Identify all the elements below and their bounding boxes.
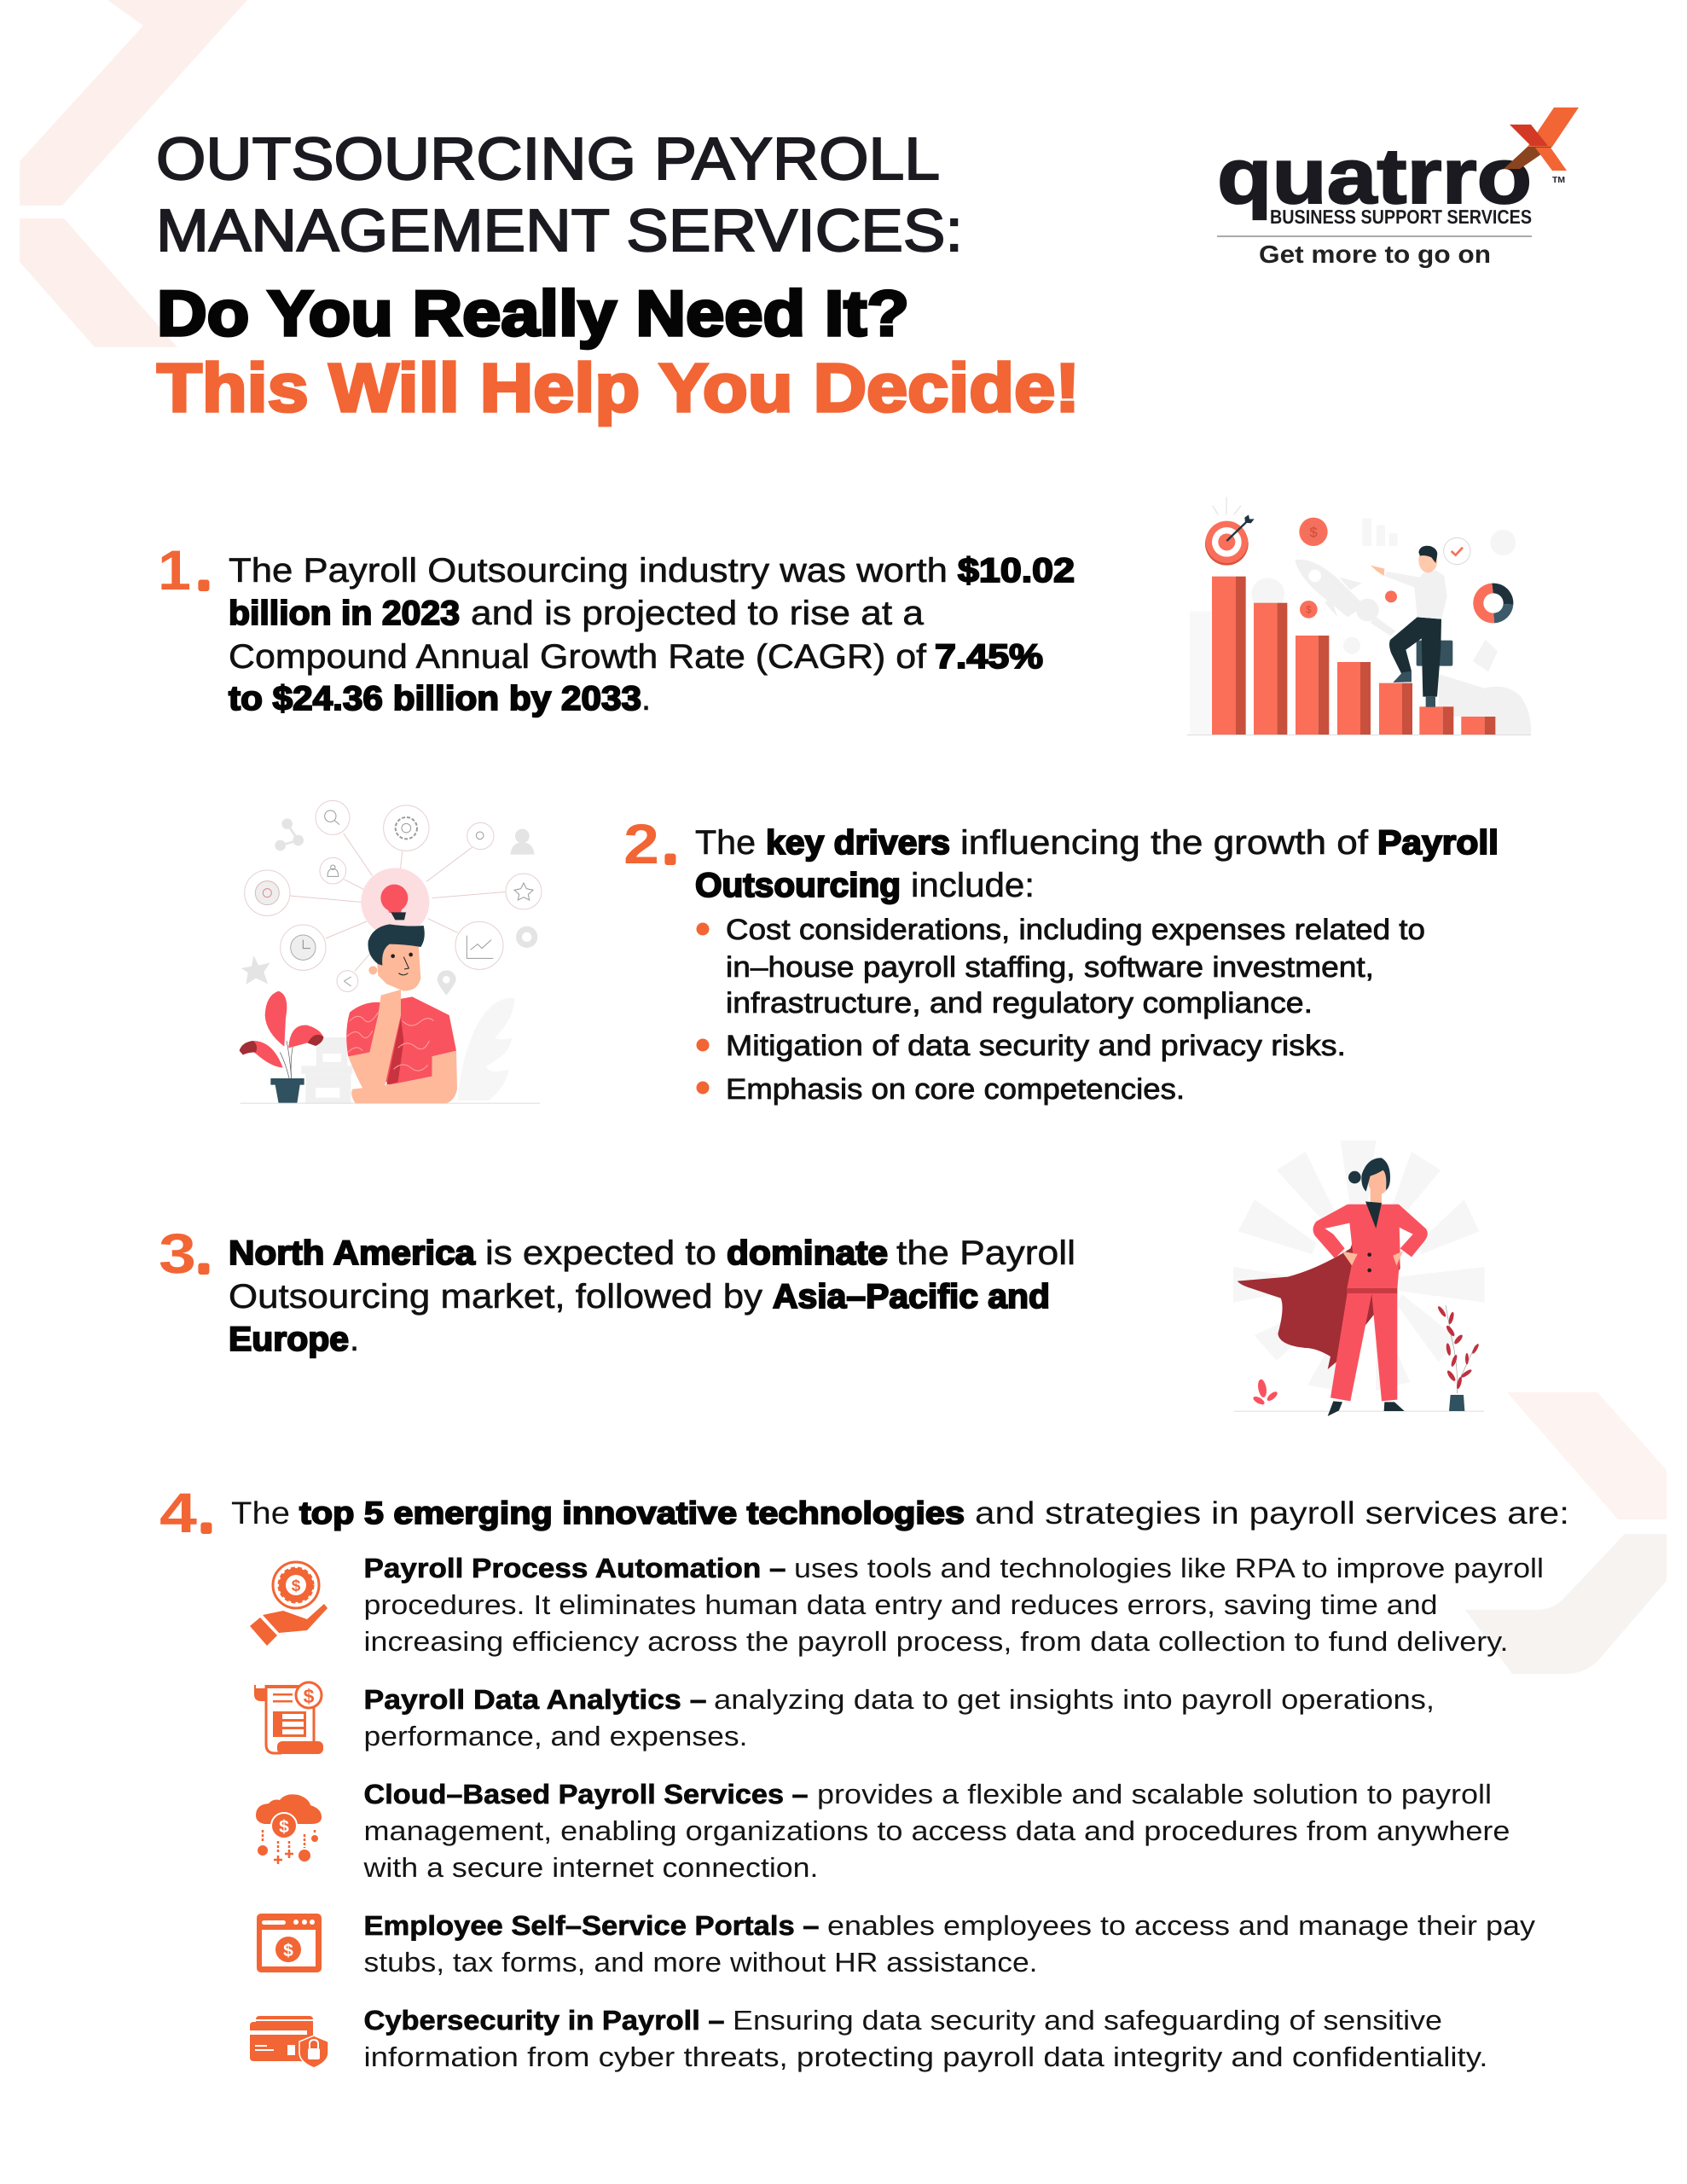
item 3 text: provides a flexible and scalable solution to payroll <box>817 1779 1492 1809</box>
item 1 text: Payroll Process Automation – <box>363 1553 786 1583</box>
target <box>1205 522 1249 566</box>
item 5 text: information from cyber threats, protecting payroll data integrity and confidentiality. <box>363 2042 1487 2072</box>
text block 3: North America <box>229 1234 476 1272</box>
item 1 text: procedures. It eliminates human data entry and reduces errors, saving time and <box>363 1589 1438 1620</box>
icon: cloud with coin: $ <box>279 1817 289 1837</box>
text block 3: dominate <box>727 1234 888 1272</box>
donut chart <box>1492 584 1513 605</box>
bulb <box>361 868 429 936</box>
text block 1: $10.02 <box>958 552 1075 590</box>
bullet list <box>696 914 1425 1106</box>
coins <box>1299 518 1328 546</box>
text block 1 <box>229 552 1075 717</box>
number 1 <box>158 538 210 601</box>
bars <box>1212 577 1485 735</box>
number 3 <box>159 1222 210 1285</box>
text block 3: Europe <box>229 1321 349 1358</box>
section 4 heading: and strategies in payroll services are: <box>975 1496 1569 1531</box>
title: This Will Help You Decide! <box>157 350 1080 426</box>
number 3: 3 <box>159 1222 196 1285</box>
logo: quatrro <box>1217 107 1579 269</box>
bullet list: Mitigation of data security and privacy risks. <box>726 1030 1346 1062</box>
businessman <box>1417 641 1452 666</box>
gray backdrop icons <box>241 818 537 996</box>
logo: quatrro: BUSINESS SUPPORT SERVICES <box>1270 206 1532 228</box>
text block 2: include: <box>911 867 1035 904</box>
background chevron: bottom right <box>1465 1392 1667 1674</box>
text block 3: the Payroll <box>896 1234 1075 1272</box>
item 2: analytics <box>254 1682 1435 1754</box>
text block 1: The Payroll Outsourcing industry was worth <box>229 552 948 590</box>
number 3: . <box>198 1234 210 1281</box>
number 4 <box>159 1481 212 1544</box>
bullet list: Cost considerations, including expenses related to <box>726 914 1425 946</box>
title <box>156 125 1080 426</box>
text block 2: influencing the growth of <box>960 824 1369 862</box>
text block 1: and is projected to rise at a <box>471 595 925 632</box>
text block 2 <box>695 824 1499 904</box>
illustration: growth bars with businessman: $ <box>1306 604 1312 615</box>
trousers <box>1330 1291 1397 1401</box>
illustration: woman with cape <box>1233 1141 1485 1416</box>
section 4 heading <box>231 1496 1569 1531</box>
text block 3: Outsourcing market, followed by <box>229 1278 762 1316</box>
speech bubble <box>1444 537 1470 565</box>
number 4: . <box>200 1493 212 1541</box>
item 1: automation <box>250 1553 1544 1657</box>
item 2 text: Payroll Data Analytics – <box>363 1684 706 1715</box>
icon: payroll scroll: $ <box>304 1685 315 1707</box>
text block 3: is expected to <box>485 1234 716 1272</box>
section 4 heading: The <box>231 1496 290 1531</box>
item 3 text: Cloud–Based Payroll Services – <box>363 1779 809 1809</box>
text block 1: billion in 2023 <box>229 595 460 632</box>
rocket <box>1295 560 1396 636</box>
icon: payroll scroll <box>254 1682 323 1754</box>
item 4 text: Employee Self–Service Portals – <box>363 1910 819 1941</box>
item 5 text: Ensuring data security and safeguarding of sensitive <box>733 2005 1442 2036</box>
icon: browser window with coin <box>257 1914 322 1972</box>
bullet list: in–house payroll staffing, software investment, <box>726 951 1374 984</box>
item 4 text <box>363 1910 1535 1978</box>
item 5: cybersecurity <box>250 2005 1487 2072</box>
man <box>346 996 456 1085</box>
logo: quatrro: TM <box>1552 176 1565 185</box>
cape <box>1238 1228 1400 1369</box>
plants <box>1449 1395 1464 1411</box>
item 3 text <box>362 1779 1510 1883</box>
item 3 text: management, enabling organizations to access data and procedures from anywhere <box>363 1815 1510 1846</box>
icon: cloud with coin <box>256 1794 322 1864</box>
title: OUTSOURCING PAYROLL <box>156 125 940 192</box>
text block 2: The <box>695 824 756 862</box>
number 4: 4 <box>159 1481 197 1544</box>
icon: hand with gear <box>250 1562 328 1646</box>
number 2 <box>623 812 676 875</box>
item 1 text: uses tools and technologies like RPA to improve payroll <box>794 1553 1544 1583</box>
section 2 <box>623 812 1499 1106</box>
item 4: portals <box>257 1910 1535 1978</box>
item 5 text <box>363 2005 1487 2072</box>
item 3 text: with a secure internet connection. <box>362 1852 818 1883</box>
text block 3 <box>229 1234 1075 1358</box>
bullet list: Emphasis on core competencies. <box>726 1073 1185 1106</box>
icon: hand with gear: $ <box>292 1577 301 1595</box>
text block 3: . <box>350 1321 359 1358</box>
illustration: growth bars with businessman <box>1187 497 1531 735</box>
item 2 text: analyzing data to get insights into payroll operations, <box>714 1684 1435 1715</box>
bullet list: infrastructure, and regulatory compliance. <box>726 987 1313 1019</box>
plant <box>280 1041 293 1079</box>
number 2: . <box>664 824 676 872</box>
text block 2: key drivers <box>766 824 950 862</box>
illustration: growth bars with businessman: $ <box>1309 524 1318 540</box>
text block 3: Asia–Pacific and <box>773 1278 1050 1316</box>
item 1 text <box>363 1553 1544 1657</box>
text block 1: 7.45% <box>935 638 1043 676</box>
icon: cards with shield lock <box>250 2016 328 2068</box>
item 4 text: stubs, tax forms, and more without HR assistance. <box>363 1947 1037 1978</box>
illustration: thinking man with idea bulb <box>240 800 542 1104</box>
logo: quatrro: Get more to go on <box>1259 241 1491 269</box>
section 3 <box>159 1222 1075 1358</box>
item 4 text: enables employees to access and manage their pay <box>827 1910 1535 1941</box>
number 1: 1 <box>158 538 191 601</box>
item 5 text: Cybersecurity in Payroll – <box>363 2005 725 2036</box>
icon: browser window with coin: $ <box>283 1941 293 1960</box>
jacket <box>1347 1205 1400 1290</box>
title: Do You Really Need It? <box>157 277 909 349</box>
text block 2: Payroll <box>1377 824 1499 862</box>
section 4 heading: top 5 emerging innovative technologies <box>299 1496 965 1531</box>
background chevron: top left <box>20 0 247 347</box>
item 2 text: performance, and expenses. <box>363 1721 747 1751</box>
section 1 <box>158 538 1075 717</box>
text block 1: . <box>641 680 651 717</box>
number 1: . <box>198 550 210 598</box>
gray leaf and boxes <box>458 998 514 1101</box>
text block 1: to $24.36 billion by 2033 <box>229 680 641 717</box>
title: MANAGEMENT SERVICES: <box>156 197 963 264</box>
logo: quatrro: quatrro <box>1217 133 1532 220</box>
text block 2: Outsourcing <box>695 867 901 904</box>
number 2: 2 <box>623 812 659 875</box>
section 4 <box>159 1481 1569 2072</box>
text block 1: Compound Annual Growth Rate (CAGR) of <box>229 638 927 676</box>
network lines <box>290 834 506 971</box>
item 1 text: increasing efficiency across the payroll process, from data collection to fund delivery. <box>363 1626 1508 1657</box>
item 2 text <box>363 1684 1435 1751</box>
item 3: cloud <box>256 1779 1510 1883</box>
